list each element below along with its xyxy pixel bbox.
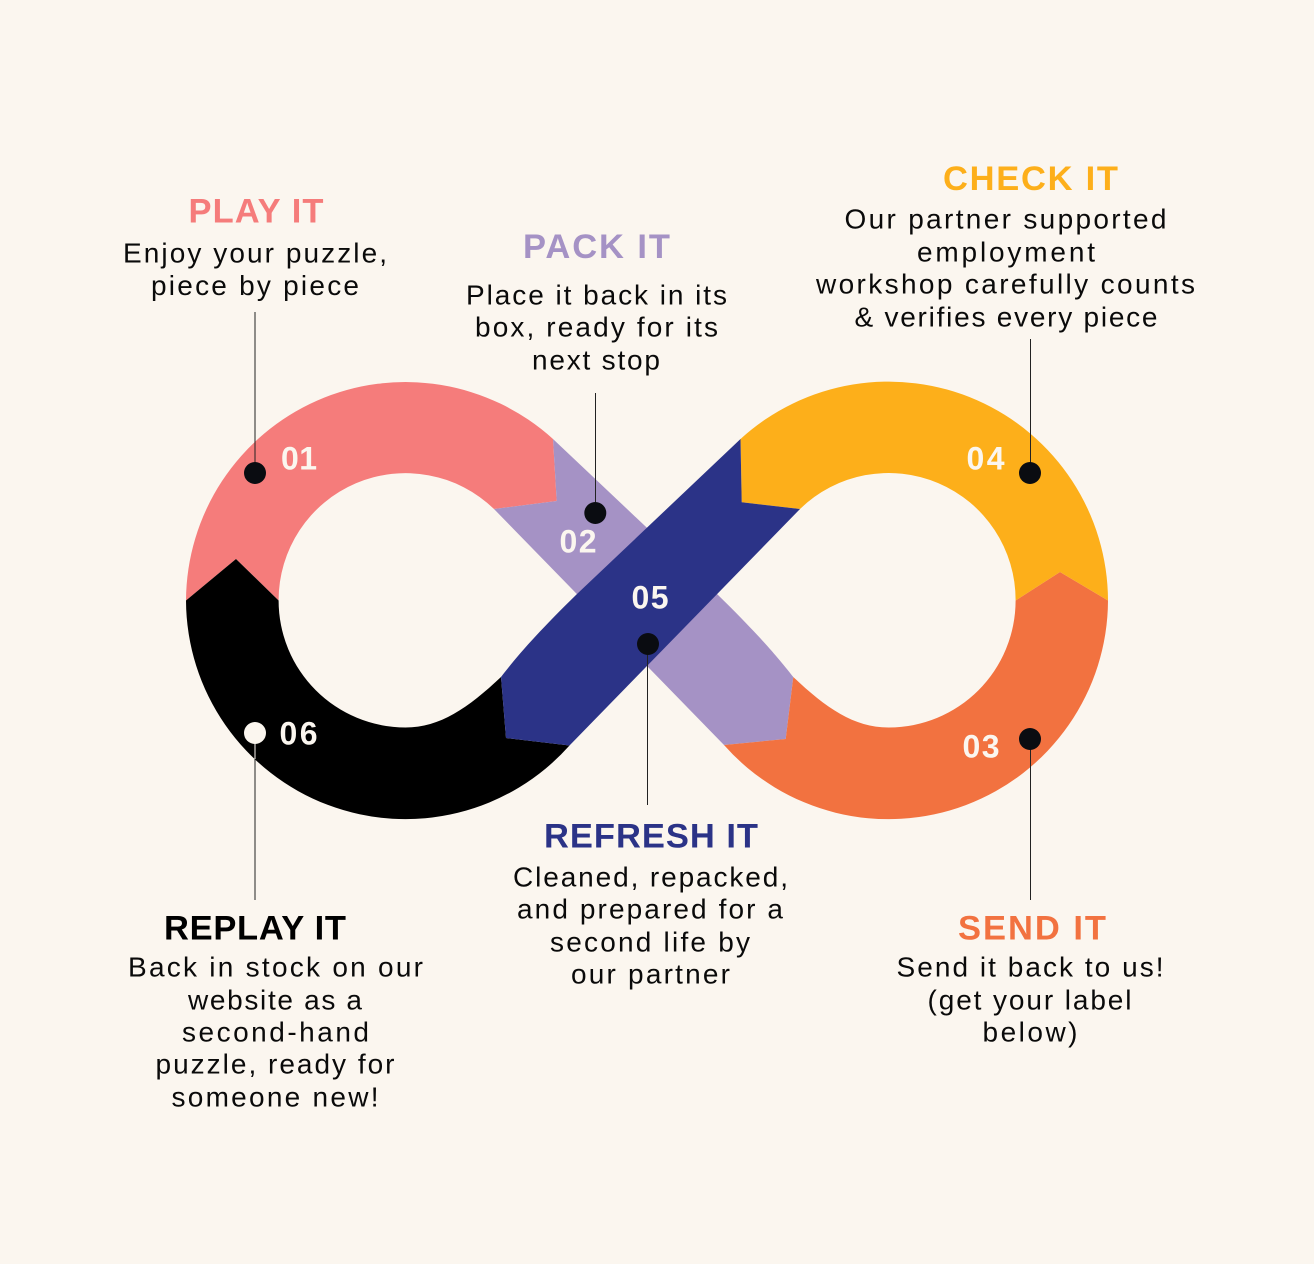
description: replay it: Back in stock on our	[128, 951, 423, 982]
description: check it: employment	[917, 236, 1095, 267]
description: pack it: box, ready for its	[475, 311, 718, 342]
leader line and marker 04	[1019, 339, 1041, 484]
leader line and marker 06	[244, 722, 266, 900]
step 02: pack it	[466, 228, 727, 559]
step 06: replay it	[128, 715, 423, 1112]
heading: replay it: REPLAY IT	[164, 909, 346, 947]
step 01: play it	[123, 192, 387, 484]
description: replay it: puzzle, ready for	[156, 1048, 394, 1079]
description: replay it: second-hand	[182, 1016, 369, 1047]
number 05: 05	[632, 579, 668, 615]
description: send it: Send it back to us!	[896, 951, 1164, 982]
description: refresh it	[513, 861, 788, 989]
step 03: send it	[896, 728, 1164, 1047]
description: replay it	[128, 951, 423, 1112]
description: refresh it: second life by	[550, 926, 750, 957]
leader line and marker 05	[637, 633, 659, 805]
description: play it	[123, 237, 387, 301]
description: refresh it: our partner	[571, 958, 730, 989]
description: send it: (get your label	[928, 984, 1132, 1015]
description: replay it: website as a	[187, 984, 362, 1015]
description: check it: workshop carefully counts	[815, 268, 1195, 299]
heading: refresh it: REFRESH IT	[544, 817, 758, 855]
leader line and marker 01	[244, 312, 266, 484]
heading: check it: CHECK IT	[943, 160, 1118, 198]
step 04: check it	[815, 160, 1195, 484]
description: refresh it: and prepared for a	[517, 893, 783, 924]
number 01: 01	[281, 440, 317, 476]
description: send it	[896, 951, 1164, 1047]
segment 01: pink	[186, 382, 557, 600]
number 03: 03	[962, 728, 1000, 764]
segment 05: navy	[501, 439, 800, 746]
number 04: 04	[966, 440, 1005, 476]
number 02: 02	[560, 523, 596, 559]
leader line and marker 02	[584, 393, 606, 524]
description: check it: & verifies every piece	[854, 301, 1158, 332]
segment 03: orange	[724, 572, 1108, 819]
heading: play it: PLAY IT	[188, 192, 324, 230]
description: pack it	[466, 279, 727, 375]
description: play it: piece by piece	[151, 270, 359, 301]
description: check it: Our partner supported	[844, 203, 1166, 234]
segment 04: yellow	[740, 382, 1108, 600]
description: send it: below)	[982, 1016, 1078, 1047]
segment 06: black	[186, 559, 570, 819]
heading: send it: SEND IT	[958, 909, 1106, 947]
step 05: refresh it	[513, 579, 788, 989]
leader line and marker 03	[1019, 728, 1041, 900]
description: check it	[815, 203, 1195, 332]
infinity loop diagram	[186, 382, 1108, 819]
description: refresh it: Cleaned, repacked,	[513, 861, 788, 892]
description: replay it: someone new!	[172, 1081, 378, 1112]
segment 02: lavender	[494, 439, 793, 745]
description: pack it: next stop	[532, 344, 660, 375]
number 06: 06	[280, 715, 318, 751]
description: pack it: Place it back in its	[466, 279, 727, 310]
heading: pack it: PACK IT	[523, 228, 670, 266]
description: play it: Enjoy your puzzle,	[123, 237, 387, 268]
